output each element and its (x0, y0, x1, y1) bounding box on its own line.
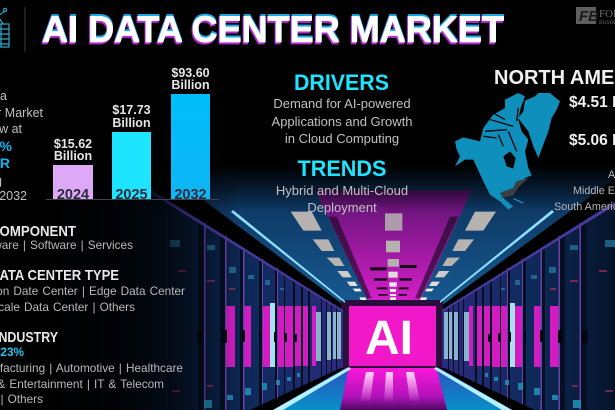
right server racks (434, 133, 615, 410)
bar 2024: Billion (54, 149, 92, 163)
bar 2024: 2024 (57, 187, 89, 203)
panel: drivers: Demand for AI-powered (273, 96, 411, 111)
icon: server rack with network nodes (0, 8, 9, 47)
panel: trends: TRENDS (298, 156, 386, 181)
panel: industry (0, 329, 183, 406)
bar 2024 (53, 137, 93, 203)
bar 2032: Billion (171, 78, 210, 92)
logo: Fortune Business Insights (576, 7, 615, 26)
bar 2025: $17.73 (112, 103, 151, 117)
panel: north america (455, 67, 615, 213)
logo: Fortune Business Insights: FB (579, 8, 599, 25)
panel: trends (276, 156, 408, 215)
header divider (24, 7, 26, 52)
bar 2032: $93.60 (171, 66, 210, 80)
bar 2032: 2032 (174, 187, 207, 203)
chart baseline (46, 199, 219, 200)
panel: data center type (0, 267, 185, 314)
left server racks (60, 133, 351, 410)
panel: component (0, 223, 133, 252)
panel: drivers: DRIVERS (294, 70, 389, 95)
map of north america (455, 93, 560, 210)
ceiling (150, 160, 615, 306)
bar 2024: $15.62 (54, 137, 92, 151)
bar 2025: 2025 (115, 187, 148, 203)
bar 2025 (112, 103, 151, 203)
panel: trends: Deployment (307, 200, 377, 215)
panel: drivers: Applications and Growth (272, 114, 412, 129)
back wall (341, 300, 443, 368)
panel: drivers (272, 70, 412, 146)
bar 2025: Billion (112, 116, 151, 130)
bar 2032 (171, 66, 210, 203)
other regions (554, 169, 615, 213)
bar chart: market size (46, 66, 219, 203)
text block: market summary (0, 89, 44, 203)
panel: trends: Hybrid and Multi-Cloud (276, 183, 408, 198)
floor (273, 366, 512, 410)
AI screen (349, 306, 436, 366)
title: AI DATA CENTER MARKET (42, 9, 504, 50)
AI screen: AI (365, 312, 413, 365)
panel: drivers: in Cloud Computing (285, 131, 399, 146)
